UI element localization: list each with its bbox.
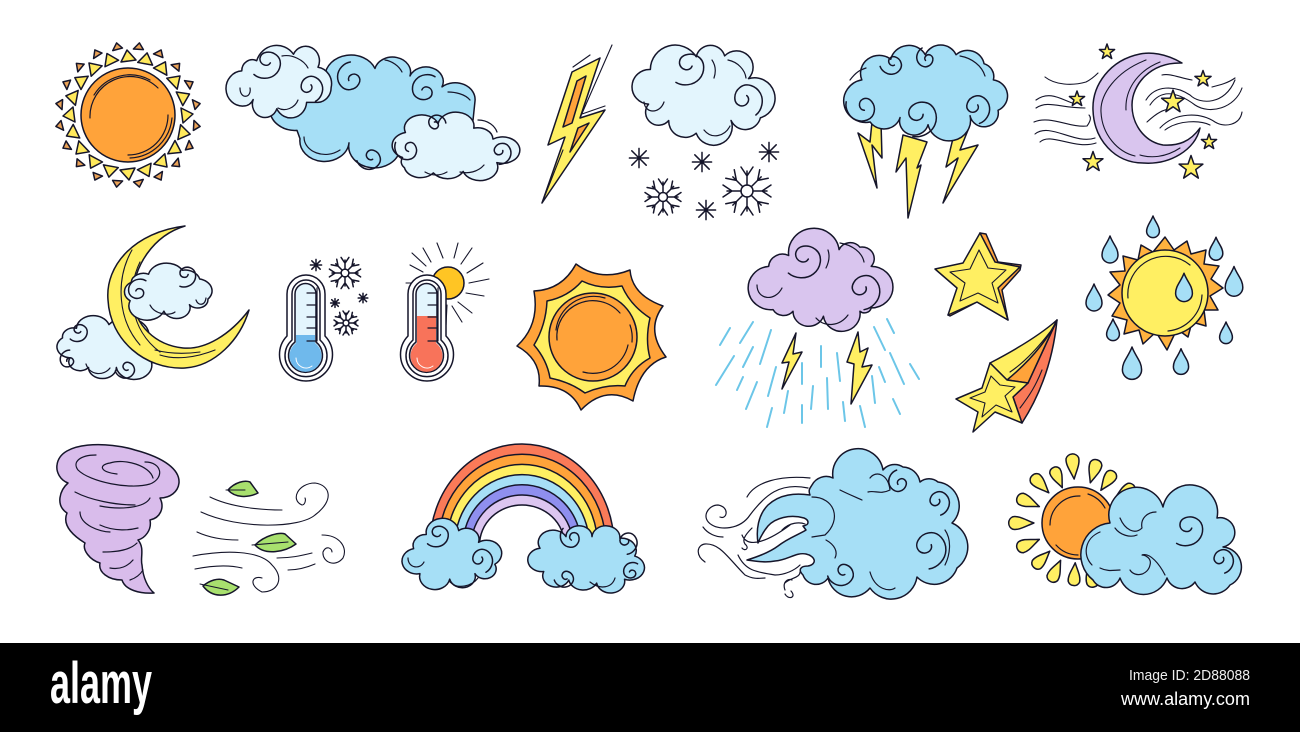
icon: storm cloud with three bolts xyxy=(844,45,1008,218)
icon: cold thermometer with snowflakes xyxy=(280,257,368,381)
icon: rainbow with clouds xyxy=(402,444,644,593)
icon: hot thermometer with sun xyxy=(401,243,489,381)
icon: lightning bolt xyxy=(542,45,612,203)
icon: sun behind cloud xyxy=(1009,453,1241,594)
icon: shooting star xyxy=(956,320,1057,432)
icon: purple rain cloud with lightning xyxy=(716,228,919,427)
icon: crescent moon with wind and stars xyxy=(1034,44,1242,178)
icon: snow cloud with flakes xyxy=(629,45,779,220)
logo: alamy: alamy xyxy=(50,651,152,716)
icon: spiky orange sun xyxy=(517,264,666,410)
website text: www.alamy.com xyxy=(1120,689,1250,709)
icon: windy wave cloud xyxy=(698,449,968,599)
icon: sun with raindrops xyxy=(1086,216,1243,379)
icon: yellow crescent moon with clouds xyxy=(57,226,249,382)
icon: three overlapping clouds xyxy=(226,45,520,181)
icon: wind with leaves xyxy=(193,481,344,595)
icon: tornado xyxy=(57,445,179,593)
icon: 3D yellow star xyxy=(935,233,1021,320)
icon: sun with triangle rays xyxy=(55,42,201,188)
footer band xyxy=(0,643,1300,732)
image id text: Image ID: 2D88088 xyxy=(1129,667,1250,684)
